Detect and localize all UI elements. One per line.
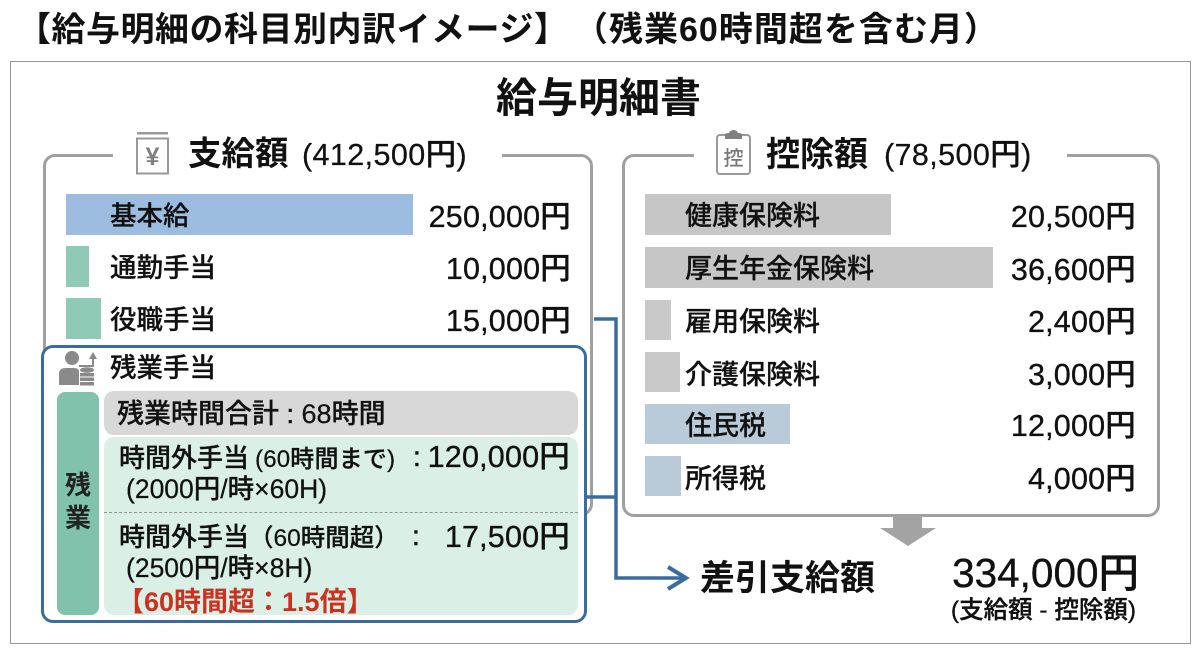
row: position allowance (66, 298, 571, 339)
net pay value: 334,000円 (952, 550, 1139, 596)
divider (104, 512, 578, 513)
deductions heading background (694, 145, 1067, 167)
total overtime hours (104, 391, 578, 435)
icon: person with coins (59, 351, 97, 386)
icon: yen receipt: ¥ (146, 143, 160, 171)
row: nursing care insurance (645, 352, 1136, 392)
overtime above 60 hours rate: (2500円/時×8H) (126, 553, 312, 583)
payments heading: 支給額 (188, 136, 288, 173)
payments total: (412,500円) (302, 138, 467, 172)
overtime up to 60 hours value: 120,000円 (428, 440, 570, 474)
icon: clipboard: 控 (724, 142, 744, 171)
value: pension: 36,600円 (1011, 253, 1136, 287)
value: commuting allowance: 10,000円 (446, 252, 571, 286)
bar: nursing care insurance (645, 352, 680, 392)
overtime above 60 hours colon: : (412, 520, 420, 551)
icon: yen receipt (136, 132, 169, 174)
label: health insurance: 健康保険料 (685, 201, 820, 231)
label: employment insurance: 雇用保険料 (685, 307, 820, 337)
panel: overtime (41, 345, 587, 623)
label: income tax: 所得税 (685, 464, 766, 494)
label: commuting allowance: 通勤手当 (110, 253, 216, 283)
row: basic salary (66, 194, 571, 235)
row: resident tax (645, 404, 1136, 444)
bar: basic salary (66, 194, 413, 235)
label: resident tax: 住民税 (685, 411, 766, 441)
value: basic salary: 250,000円 (429, 200, 571, 234)
value: nursing care insurance: 3,000円 (1028, 358, 1136, 392)
bar: income tax (645, 456, 681, 496)
value: resident tax: 12,000円 (1011, 409, 1136, 443)
overtime up to 60 hours rate: (2000円/時×60H) (126, 474, 327, 504)
overtime side label (57, 392, 99, 615)
overtime heading: 残業手当 (110, 353, 216, 383)
row: employment insurance (645, 300, 1136, 340)
net pay label: 差引支給額 (700, 559, 875, 598)
panel: payments (43, 154, 593, 516)
overtime up to 60 hours colon: : (413, 441, 421, 472)
side label text: 残業 (65, 470, 91, 533)
label: position allowance: 役職手当 (110, 305, 216, 335)
title: 【給与明細の科目別内訳イメージ】 (17, 11, 568, 49)
title condition: （残業60時間超を含む月） (574, 11, 999, 49)
panel: deductions (622, 154, 1160, 517)
bar: employment insurance (645, 300, 671, 340)
value: income tax: 4,000円 (1028, 462, 1136, 496)
overtime above 60 hours label: 時間外手当（60時間超） (119, 522, 399, 552)
value: health insurance: 20,500円 (1011, 200, 1136, 234)
bar: commuting allowance (66, 246, 89, 287)
overtime up to 60 hours label: 時間外手当(60時間まで) (119, 443, 395, 473)
payslip heading: 給与明細書 (496, 75, 701, 121)
overtime breakdown (104, 437, 578, 615)
premium rate note: 【60時間超：1.5倍】 (117, 587, 374, 617)
bar: health insurance (645, 194, 891, 235)
icon: clipboard (716, 130, 751, 175)
deductions heading: 控除額 (766, 136, 868, 174)
payments heading background (113, 145, 502, 167)
net pay formula: (支給額 - 控除額) (951, 597, 1136, 624)
row: health insurance (645, 194, 1136, 235)
label: nursing care insurance: 介護保険料 (685, 360, 820, 390)
total overtime hours text: 残業時間合計 : 68時間 (117, 399, 386, 429)
deductions total: (78,500円) (884, 138, 1032, 172)
label: pension: 厚生年金保険料 (685, 254, 874, 284)
bar: resident tax (645, 404, 790, 444)
value: position allowance: 15,000円 (446, 304, 571, 338)
overtime above 60 hours value: 17,500円 (445, 520, 570, 554)
bar: pension (645, 247, 993, 288)
bar: position allowance (66, 298, 101, 339)
value: employment insurance: 2,400円 (1028, 305, 1136, 339)
row: pension (645, 247, 1136, 288)
row: income tax (645, 456, 1136, 496)
label: basic salary: 基本給 (110, 201, 190, 231)
row: commuting allowance (66, 246, 571, 287)
